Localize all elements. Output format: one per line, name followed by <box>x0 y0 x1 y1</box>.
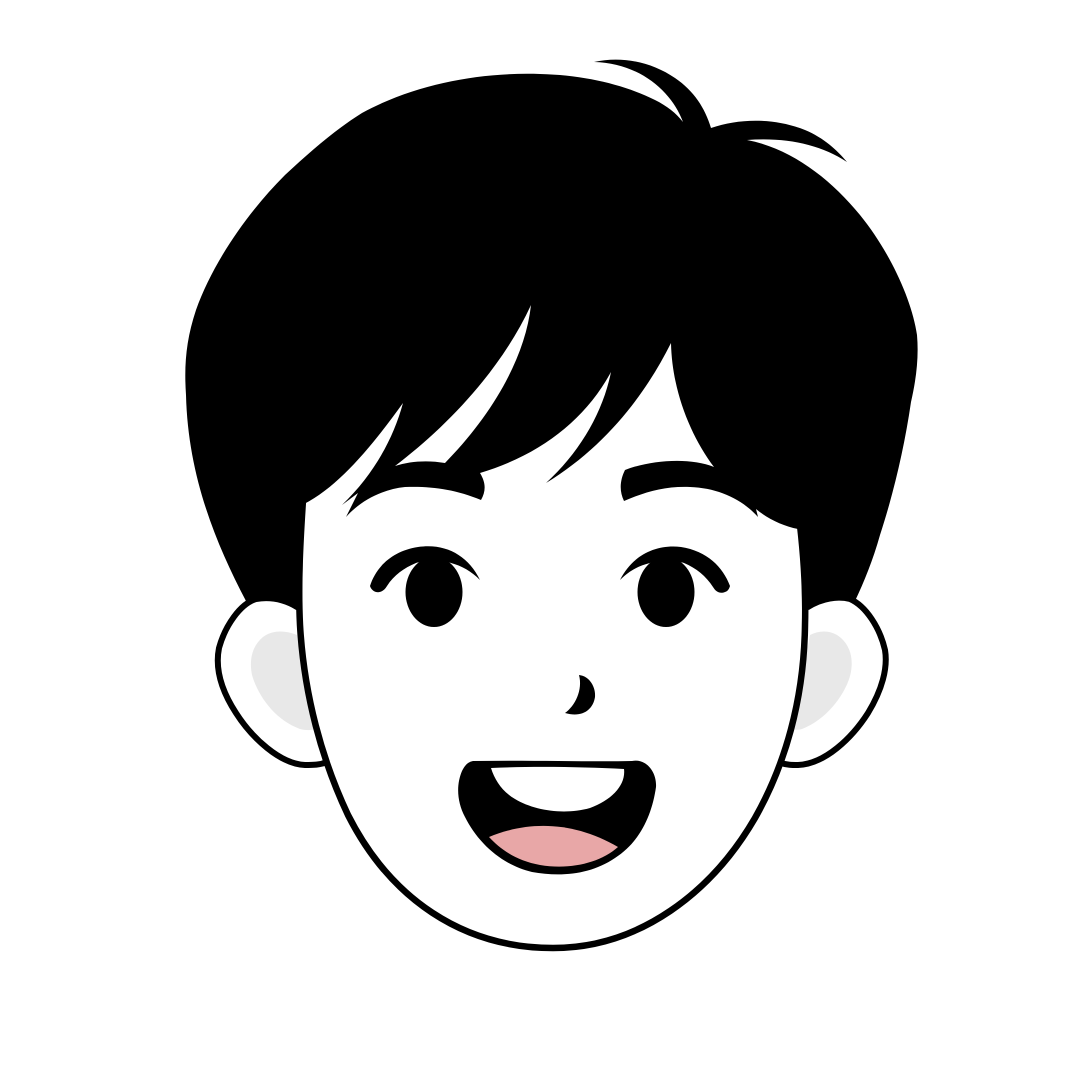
left pupil <box>406 557 462 627</box>
tongue <box>489 826 618 867</box>
nose <box>565 675 595 715</box>
left eye <box>370 546 480 627</box>
right ear shading <box>793 632 852 730</box>
upper teeth <box>491 767 624 811</box>
right ear <box>770 598 886 765</box>
hair <box>185 60 918 608</box>
left eyelash arc <box>370 546 480 592</box>
face outline <box>299 500 805 948</box>
right pupil <box>638 557 694 627</box>
right eye <box>620 547 730 627</box>
mouth <box>458 761 656 874</box>
left ear shading <box>251 631 318 730</box>
left ear <box>218 598 340 765</box>
right eyelash arc <box>620 547 730 593</box>
hair highlight strand <box>395 305 531 466</box>
